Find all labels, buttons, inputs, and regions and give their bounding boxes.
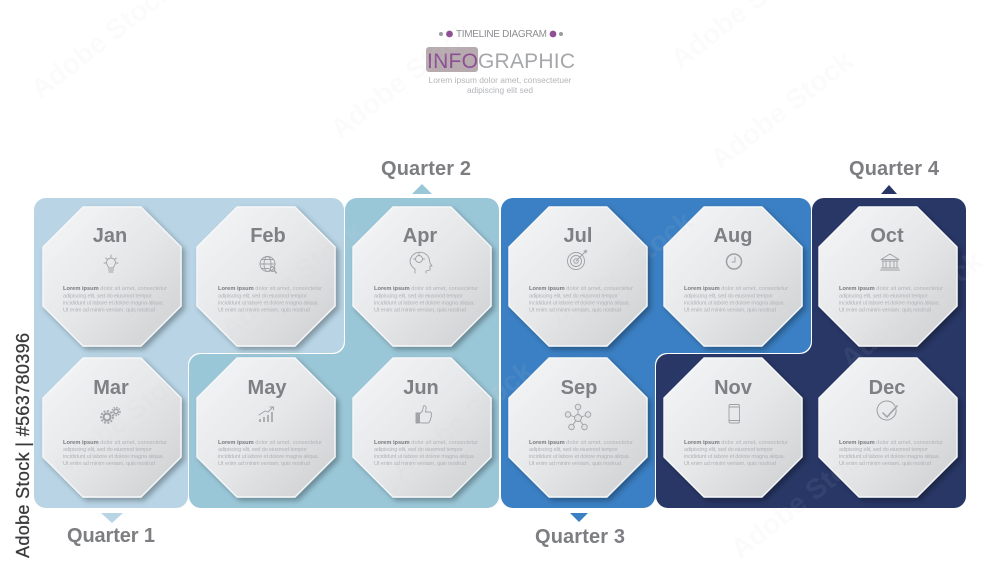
- card: Oct: adipiscing elit, sed do eiusmod tempor: [839, 294, 928, 300]
- faint diagonal stock marks: Adobe Stock: [385, 355, 539, 485]
- icon: clock: [726, 254, 742, 269]
- card: Feb: Lorem ipsum dolor sit amet, consectetur: [218, 286, 322, 292]
- card: May: incididunt ut labore et dolore magna aliqua.: [218, 454, 319, 460]
- subtitle: [429, 75, 572, 95]
- card: May: Lorem ipsum dolor sit amet, consectetur: [218, 440, 322, 446]
- card: Sep: incididunt ut labore et dolore magna aliqua.: [529, 454, 630, 460]
- card: Jun: incididunt ut labore et dolore magna aliqua.: [374, 454, 475, 460]
- faint diagonal stock marks: Adobe Stock: [705, 45, 859, 175]
- label: quarter 1: Quarter 1: [67, 525, 155, 547]
- card: Feb: incididunt ut labore et dolore magna aliqua.: [218, 300, 319, 306]
- faint diagonal stock marks: Adobe Stock: [325, 15, 479, 145]
- label: quarter 4: Quarter 4: [849, 158, 940, 180]
- card: Oct: [819, 207, 957, 346]
- header: timeline diagram: TIMELINE DIAGRAM: [456, 29, 547, 40]
- card: Nov: Nov: [714, 377, 753, 399]
- card: Apr: Lorem ipsum dolor sit amet, consectetur: [374, 286, 478, 292]
- subtitle: Lorem ipsum dolor amet, consectetuer: [429, 75, 572, 85]
- label: quarter 2: Quarter 2: [381, 158, 471, 180]
- card: Dec: Ut enim ad minim veniam, quis nostrud: [839, 461, 931, 467]
- card: Nov: Ut enim ad minim veniam, quis nostrud: [684, 461, 776, 467]
- card: Mar: incididunt ut labore et dolore magna aliqua.: [63, 454, 164, 460]
- card: May: May: [248, 377, 287, 399]
- panel: quarter 4 background: [656, 198, 966, 508]
- title: infographic: [426, 47, 575, 73]
- card: Jun: Lorem ipsum dolor sit amet, consectetur: [374, 440, 478, 446]
- card: Jul: incididunt ut labore et dolore magna aliqua.: [529, 300, 630, 306]
- card: Jul: Ut enim ad minim veniam, quis nostrud: [529, 308, 621, 314]
- panel: quarter 1 background: [34, 198, 344, 508]
- icon: thumbs up: [416, 406, 432, 423]
- card: Sep: Sep: [561, 377, 597, 399]
- card: Dec: incididunt ut labore et dolore magna aliqua.: [839, 454, 940, 460]
- card: Dec: Dec: [869, 377, 905, 399]
- icon: smartphone: [729, 404, 740, 423]
- card: Apr: Ut enim ad minim veniam, quis nostrud: [374, 308, 466, 314]
- icon: check mark circle: [877, 401, 897, 420]
- card: Jun: adipiscing elit, sed do eiusmod tempor: [374, 447, 463, 453]
- card: Feb: adipiscing elit, sed do eiusmod tempor: [218, 294, 307, 300]
- card: Nov: [664, 358, 802, 497]
- card: Apr: Apr: [403, 225, 437, 247]
- label: quarter 1: [67, 513, 155, 547]
- card: Aug: incididunt ut labore et dolore magna aliqua.: [684, 300, 785, 306]
- icon: light bulb: [104, 255, 118, 272]
- subtitle: adipiscing elit sed: [467, 85, 533, 95]
- card: Aug: adipiscing elit, sed do eiusmod tempor: [684, 294, 773, 300]
- card: Jan: Ut enim ad minim veniam, quis nostrud: [63, 308, 155, 314]
- label: quarter 4: [849, 158, 940, 194]
- title: infographic: GRAPHIC: [478, 50, 575, 73]
- icon: bank building: [880, 254, 900, 270]
- card: Jan: Lorem ipsum dolor sit amet, consectetur: [63, 286, 167, 292]
- icon: growth chart: [259, 407, 274, 422]
- card: Mar: Ut enim ad minim veniam, quis nostrud: [63, 461, 155, 467]
- card: Jan: Jan: [93, 225, 127, 247]
- icon: people network: [565, 404, 591, 430]
- card: Jan: [43, 207, 181, 346]
- icon: gears: [101, 408, 120, 423]
- card: May: [197, 358, 335, 497]
- panel: quarter 2 background: [189, 198, 499, 508]
- faint diagonal stock marks: Adobe Stock: [45, 355, 199, 485]
- label: quarter 3: [535, 513, 625, 548]
- card: Jun: Jun: [403, 377, 439, 399]
- card: Jul: Lorem ipsum dolor sit amet, consectetur: [529, 286, 633, 292]
- card: Aug: Ut enim ad minim veniam, quis nostrud: [684, 308, 776, 314]
- card: Jun: Ut enim ad minim veniam, quis nostrud: [374, 461, 466, 467]
- card: Aug: Lorem ipsum dolor sit amet, consectetur: [684, 286, 788, 292]
- card: Aug: Aug: [714, 225, 752, 247]
- card: Sep: Lorem ipsum dolor sit amet, consectetur: [529, 440, 633, 446]
- card: Dec: [819, 358, 957, 497]
- card: Nov: incididunt ut labore et dolore magna aliqua.: [684, 454, 785, 460]
- card: Jul: Jul: [564, 225, 592, 247]
- card: May: Ut enim ad minim veniam, quis nostrud: [218, 461, 310, 467]
- title: infographic: INFO: [427, 50, 478, 73]
- card: Sep: [509, 358, 647, 497]
- card: Mar: [43, 358, 181, 497]
- card: Apr: [353, 207, 491, 346]
- card: Oct: incididunt ut labore et dolore magna aliqua.: [839, 300, 940, 306]
- panel: quarter 3 background: [501, 198, 811, 508]
- card: Dec: Lorem ipsum dolor sit amet, consectetur: [839, 440, 943, 446]
- card: Jan: incididunt ut labore et dolore magna aliqua.: [63, 300, 164, 306]
- card: Jul: [509, 207, 647, 346]
- card: Mar: Lorem ipsum dolor sit amet, consectetur: [63, 440, 167, 446]
- card: Jan: adipiscing elit, sed do eiusmod tempor: [63, 294, 152, 300]
- card: Feb: Feb: [250, 225, 286, 247]
- card: Oct: Oct: [870, 225, 904, 247]
- card: May: adipiscing elit, sed do eiusmod tempor: [218, 447, 307, 453]
- icon: head with idea: [410, 252, 432, 273]
- card: Sep: Ut enim ad minim veniam, quis nostrud: [529, 461, 621, 467]
- card: Mar: adipiscing elit, sed do eiusmod tempor: [63, 447, 152, 453]
- card: Nov: adipiscing elit, sed do eiusmod tempor: [684, 447, 773, 453]
- card: Apr: incididunt ut labore et dolore magna aliqua.: [374, 300, 475, 306]
- icon: target: [568, 250, 587, 270]
- faint diagonal stock marks: Adobe Stock: [545, 205, 699, 335]
- card: Oct: Lorem ipsum dolor sit amet, consectetur: [839, 286, 943, 292]
- label: quarter 3: Quarter 3: [535, 526, 625, 548]
- card: Nov: Lorem ipsum dolor sit amet, consectetur: [684, 440, 788, 446]
- card: Jun: [353, 358, 491, 497]
- source credit: vertical stock label: Adobe Stock | #563780396: [13, 333, 33, 558]
- faint diagonal stock marks: Adobe Stock: [725, 435, 879, 565]
- faint diagonal stock marks: Adobe Stock: [215, 215, 369, 345]
- card: Aug: [664, 207, 802, 346]
- card: Feb: Ut enim ad minim veniam, quis nostrud: [218, 308, 310, 314]
- card: Oct: Ut enim ad minim veniam, quis nostrud: [839, 308, 931, 314]
- card: Jul: adipiscing elit, sed do eiusmod tempor: [529, 294, 618, 300]
- card: Feb: [197, 207, 335, 346]
- card: Apr: adipiscing elit, sed do eiusmod tempor: [374, 294, 463, 300]
- card: Mar: Mar: [93, 377, 129, 399]
- icon: globe search: [260, 256, 276, 273]
- faint diagonal stock marks: Adobe Stock: [835, 245, 989, 375]
- label: quarter 2: [381, 158, 471, 194]
- card: Sep: adipiscing elit, sed do eiusmod tempor: [529, 447, 618, 453]
- card: Dec: adipiscing elit, sed do eiusmod tempor: [839, 447, 928, 453]
